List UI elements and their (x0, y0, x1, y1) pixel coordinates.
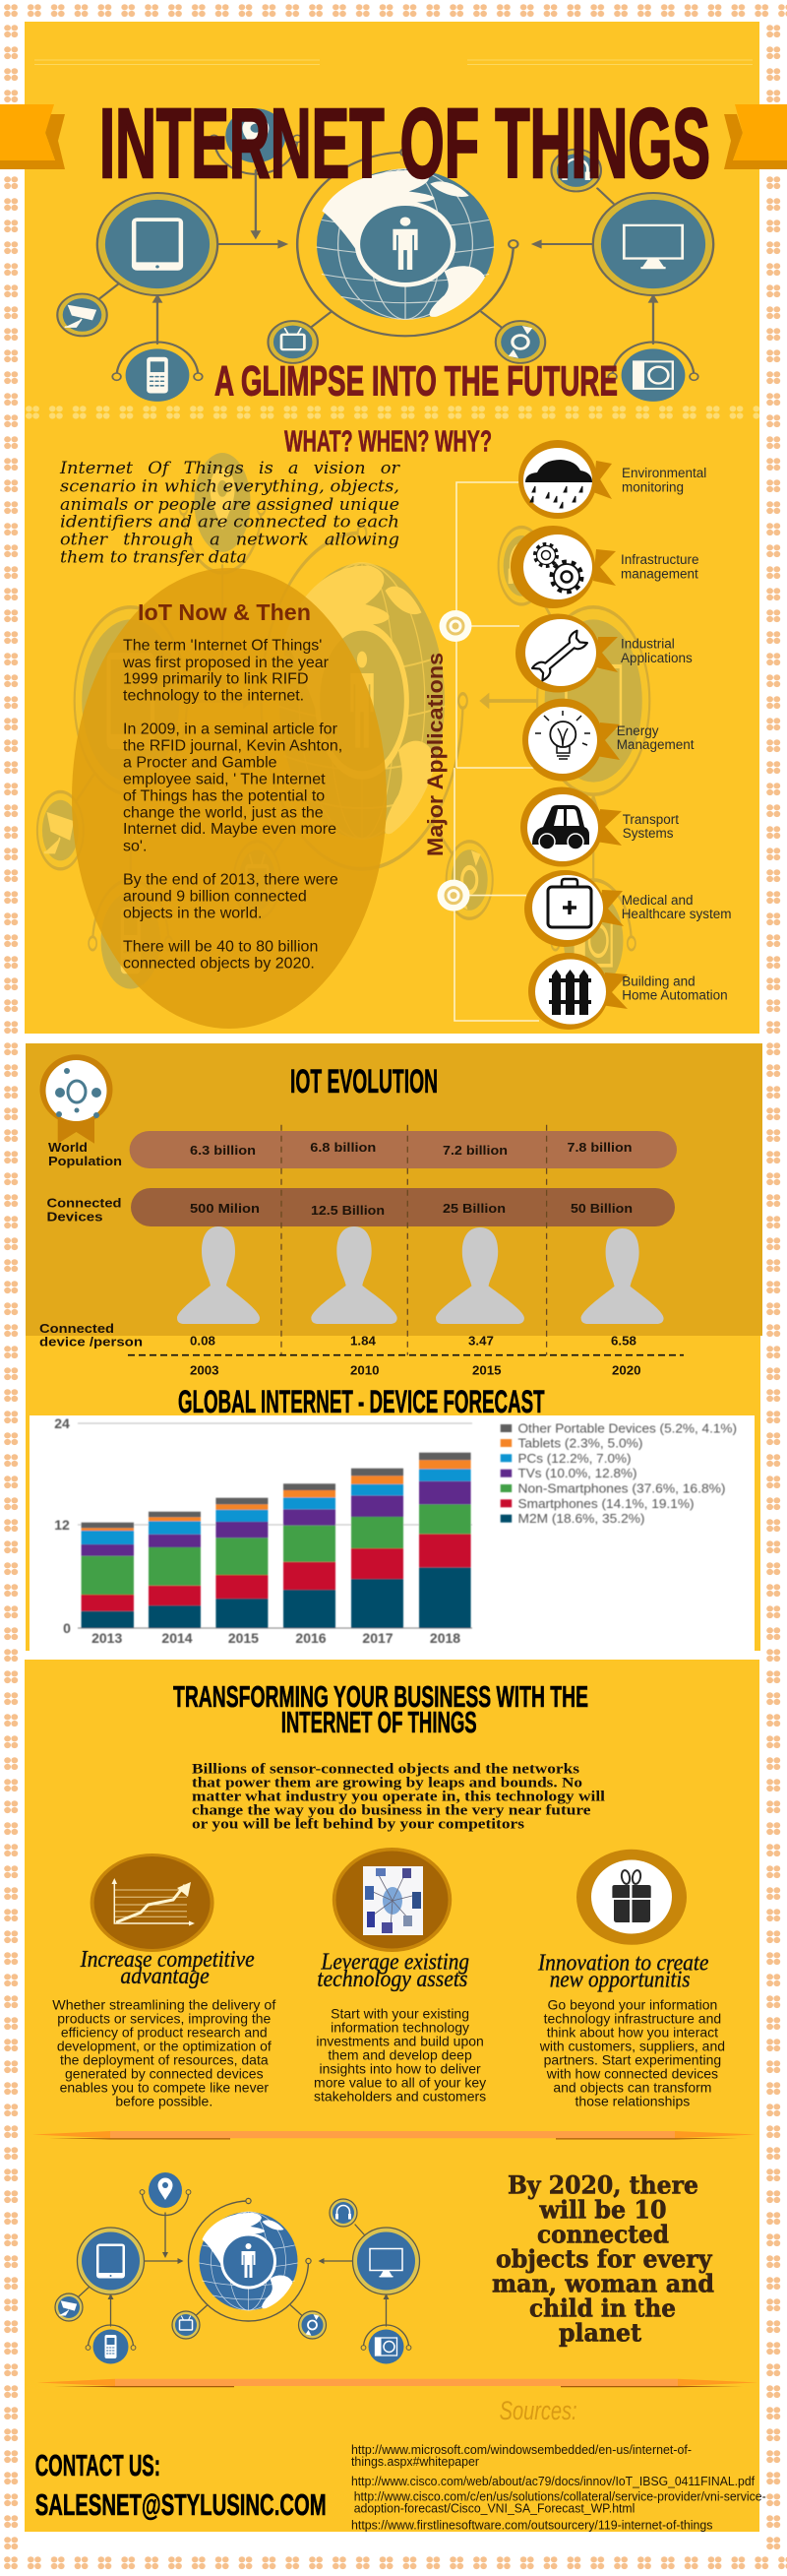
stack 2016 (283, 1483, 335, 1628)
badge (39, 1054, 112, 1144)
label: Applications (621, 651, 693, 665)
row labels: World (48, 1140, 88, 1155)
text: IoT history: There will be 40 to 80 billion (123, 938, 318, 955)
label: Energy (617, 723, 659, 738)
legend: M2M (18.6%, 35.2%) (517, 1511, 645, 1526)
body text: enables you to compete like never (60, 2080, 269, 2096)
row labels: Population (48, 1154, 122, 1168)
body text: the deployment of resources, data (60, 2052, 269, 2068)
body text: stakeholders and customers (314, 2089, 486, 2105)
devices per person values (190, 1334, 636, 1349)
body text: those relationships (575, 2094, 690, 2109)
body text (52, 1997, 275, 2109)
bar chart: device forecast: 0 (63, 1620, 71, 1636)
panel: header (0, 22, 787, 421)
label: major applications: Major Applications (423, 653, 448, 856)
column: new opportunities (537, 1850, 725, 2109)
row labels: Devices (47, 1210, 102, 1225)
body text: partners. Start experimenting (544, 2052, 721, 2068)
x axis years: 2013 (91, 1630, 122, 1646)
year labels: 2020 (612, 1363, 641, 1378)
body text (314, 2006, 486, 2105)
text: IoT history: objects in the world. (123, 905, 262, 921)
row labels: Connected (39, 1321, 114, 1336)
icon: growth chart (91, 1853, 214, 1952)
subheading: Increase competitive (80, 1947, 255, 1973)
subheading (537, 1951, 709, 1993)
intro paragraph: Billions of sensor-connected objects and the networks (192, 1762, 579, 1778)
label: Environmental (622, 466, 706, 480)
text: IoT history: around 9 billion connected (123, 889, 307, 906)
label: Transport (623, 812, 679, 827)
x axis years (91, 1630, 460, 1646)
callout: 10 connected objects: man, woman and (492, 2269, 714, 2297)
source links (351, 2442, 766, 2532)
band: connected devices: 25 Billion (443, 1201, 506, 1216)
panel: transforming your business (25, 1660, 766, 2532)
legend: Non-Smartphones (37.6%, 16.8%) (517, 1480, 726, 1496)
text: IoT history: 1999 primarily to link RIFD (123, 671, 309, 687)
diagram: connected devices network, small (55, 2172, 419, 2364)
year labels (190, 1363, 641, 1378)
band: world population: 7.2 billion (443, 1143, 508, 1158)
subheading (317, 1950, 469, 1992)
contact: SALESNET@STYLUSINC.COM (35, 2487, 327, 2522)
intro text: identifiers and are connected to each (60, 512, 399, 532)
intro paragraph: that power them are growing by leaps and bounds. No (192, 1776, 582, 1791)
x axis years: 2016 (295, 1630, 327, 1646)
label: monitoring (622, 479, 684, 494)
stack 2014 (149, 1512, 201, 1628)
body text: Start with your existing (331, 2006, 469, 2022)
callout: 10 connected objects: objects for every (496, 2244, 713, 2273)
callout: 10 connected objects: By 2020, there (508, 2170, 698, 2199)
body text: with how connected devices (546, 2066, 718, 2082)
devices per person values: 3.47 (468, 1334, 494, 1349)
devices per person values: 1.84 (350, 1334, 376, 1349)
subheading: new opportunitis (550, 1968, 691, 1993)
subheading: Innovation to create (537, 1951, 709, 1977)
body text: efficiency of product research and (61, 2025, 268, 2041)
band: world population: 6.3 billion (190, 1143, 256, 1158)
text: IoT history: change the world, just as the (123, 804, 324, 821)
label: Building and (622, 974, 696, 988)
callout: 10 connected objects: connected (537, 2220, 669, 2248)
application: environmental monitoring (518, 440, 706, 519)
heading: sources: Sources: (500, 2396, 577, 2425)
legend: PCs (12.2%, 7.0%) (517, 1451, 632, 1466)
text: IoT history: was first proposed in the year (122, 655, 330, 671)
band: world population: 7.8 billion (567, 1140, 632, 1155)
body text: think about how you interact (547, 2025, 718, 2041)
devices per person values: 0.08 (190, 1334, 215, 1349)
text: IoT history: technology to the internet. (123, 688, 304, 705)
band: connected devices: 50 Billion (571, 1201, 633, 1216)
text: IoT history: In 2009, in a seminal article for (123, 721, 338, 738)
heading (173, 1679, 588, 1739)
row labels (39, 1140, 143, 1350)
body text: before possible. (115, 2094, 212, 2109)
year labels: 2003 (190, 1363, 219, 1378)
intro text: other through a network allowing (60, 531, 399, 550)
body text: products or services, improving the (57, 2011, 272, 2027)
callout: 10 connected objects: child in the (529, 2293, 676, 2322)
band: connected devices: 12.5 Billion (311, 1203, 385, 1218)
label: management (621, 566, 698, 581)
application: transport systems (520, 787, 679, 866)
callout: 10 connected objects: planet (559, 2318, 641, 2347)
legend: Tablets (2.3%, 5.0%) (517, 1435, 643, 1451)
legend (501, 1421, 737, 1526)
contact (35, 2448, 327, 2522)
heading: WHAT? WHEN? WHY? (284, 423, 492, 459)
intro paragraph (192, 1762, 605, 1833)
icon: device network photo (333, 1848, 452, 1952)
legend: Other Portable Devices (5.2%, 4.1%) (517, 1421, 737, 1435)
ribbon divider (32, 2131, 756, 2140)
text: IoT history: employee said, ' The Internet (123, 772, 326, 787)
icon: gift (576, 1850, 687, 1945)
body text: generated by connected devices (65, 2066, 264, 2082)
source links: adoption-forecast/Cisco_VNI_SA_Forecast_WP.html (354, 2501, 636, 2516)
label: Infrastructure (621, 552, 699, 567)
bar chart: device forecast: 24 (54, 1415, 70, 1431)
band: connected devices (131, 1188, 675, 1226)
source links: http://www.cisco.com/c/en/us/solutions/collateral/service-provider/vni-service- (354, 2489, 766, 2504)
devices per person values: 6.58 (611, 1334, 636, 1349)
application: energy management (522, 699, 695, 782)
label: Systems (623, 826, 674, 841)
intro text: scenario in which everything, objects, (60, 476, 399, 496)
panel: what when why (25, 421, 759, 1034)
body text: information technology (331, 2020, 469, 2036)
body text: them and develop deep (328, 2047, 472, 2063)
subheading: advantage (120, 1964, 210, 1989)
heading: IoT now and then: IoT Now & Then (138, 599, 311, 625)
text: IoT history: so'. (123, 838, 147, 854)
subheading: Leverage existing (321, 1950, 469, 1976)
application: industrial applications (515, 614, 693, 693)
application: medical (524, 870, 731, 947)
body text: more value to all of your key (314, 2075, 486, 2091)
stack 2018 (419, 1453, 471, 1628)
body text (539, 1997, 725, 2109)
text: IoT history (122, 638, 342, 973)
text: IoT history: connected objects by 2020. (123, 955, 315, 973)
band: world population (130, 1131, 677, 1168)
source links: https://www.firstlinesoftware.com/outsourcery/119-internet-of-things (351, 2517, 713, 2532)
subheading: technology assets (317, 1967, 467, 1992)
person silhouettes (177, 1226, 664, 1324)
column: technology assets (314, 1848, 486, 2105)
x axis years: 2017 (362, 1630, 394, 1646)
callout: 10 connected objects (492, 2170, 714, 2347)
stack 2015 (215, 1498, 268, 1628)
x axis years: 2015 (228, 1630, 259, 1646)
text: IoT history: the RFID journal, Kevin Ashton, (123, 738, 342, 755)
legend: TVs (10.0%, 12.8%) (517, 1466, 637, 1480)
body text: development, or the optimization of (57, 2039, 272, 2054)
year labels: 2015 (472, 1363, 502, 1378)
band: world population: 6.8 billion (310, 1140, 376, 1155)
x axis years: 2018 (430, 1630, 460, 1646)
ribbon divider (37, 2379, 757, 2387)
label: Medical and (622, 893, 693, 908)
body text: Whether streamlining the delivery of (52, 1997, 275, 2013)
ribbon: left (0, 104, 65, 169)
body text: with customers, suppliers, and (539, 2039, 725, 2054)
body text: investments and build upon (316, 2034, 484, 2049)
legend: Smartphones (14.1%, 19.1%) (517, 1496, 695, 1511)
intro text: them to transfer data (60, 548, 247, 568)
panel: IoT evolution (26, 1043, 762, 1651)
source links: http://www.microsoft.com/windowsembedded/en-us/internet-of- (351, 2442, 692, 2457)
contact: CONTACT US: (35, 2448, 160, 2482)
body text: and objects can transform (553, 2080, 711, 2096)
dashed dividers (128, 1125, 684, 1355)
stack 2013 (82, 1523, 134, 1628)
bar chart: device forecast: 12 (54, 1517, 70, 1533)
bar chart: device forecast (30, 1415, 755, 1651)
body text: insights into how to deliver (319, 2061, 481, 2077)
ochre ellipse (72, 568, 387, 1029)
column: competitive advantage (52, 1853, 275, 2109)
intro text (59, 459, 400, 568)
intro text: animals or people are assigned unique (60, 495, 399, 515)
body text: Go beyond your information (548, 1997, 717, 2013)
intro paragraph: matter what industry you operate in, this technology will (192, 1790, 605, 1805)
application: building automation (528, 953, 728, 1030)
intro paragraph: change the way you do business in the very near future (192, 1803, 591, 1819)
heading: forecast: GLOBAL INTERNET - DEVICE FORECAST (178, 1384, 545, 1419)
label: Industrial (621, 637, 675, 652)
source links: http://www.cisco.com/web/about/ac79/docs/innov/IoT_IBSG_0411FINAL.pdf (351, 2474, 755, 2488)
text: IoT history: a Procter and Gamble (123, 754, 277, 771)
heading: IOT EVOLUTION (290, 1063, 438, 1100)
text: IoT history: The term 'Internet Of Things' (123, 638, 322, 655)
text: IoT history: Internet did. Maybe even more (123, 821, 336, 838)
row labels: Connected (47, 1196, 122, 1211)
ribbon: right (724, 104, 787, 169)
label: Management (617, 737, 695, 752)
intro paragraph: or you will be left behind by your competitors (192, 1817, 524, 1833)
body text: technology infrastructure and (544, 2011, 721, 2027)
subheading (80, 1947, 255, 1989)
callout: 10 connected objects: will be 10 (539, 2195, 667, 2224)
diagram: connected devices network (57, 108, 713, 402)
text: IoT history: By the end of 2013, there were (123, 872, 338, 889)
row labels: device /person (39, 1335, 143, 1350)
band: connected devices: 500 Milion (190, 1201, 260, 1216)
stack 2017 (351, 1469, 403, 1628)
label: Healthcare system (622, 907, 731, 921)
year labels: 2010 (350, 1363, 380, 1378)
x axis years: 2014 (161, 1630, 193, 1646)
heading: INTERNET OF THINGS (281, 1705, 477, 1739)
application: infrastructure management (511, 526, 699, 608)
text: IoT history: of Things has the potential to (123, 788, 325, 805)
connector lines (437, 482, 539, 1021)
intro text: Internet Of Things is a vision or (59, 459, 400, 478)
source links: things.aspx#whitepaper (351, 2454, 480, 2469)
faded network background (37, 453, 649, 989)
label: Home Automation (622, 988, 728, 1003)
